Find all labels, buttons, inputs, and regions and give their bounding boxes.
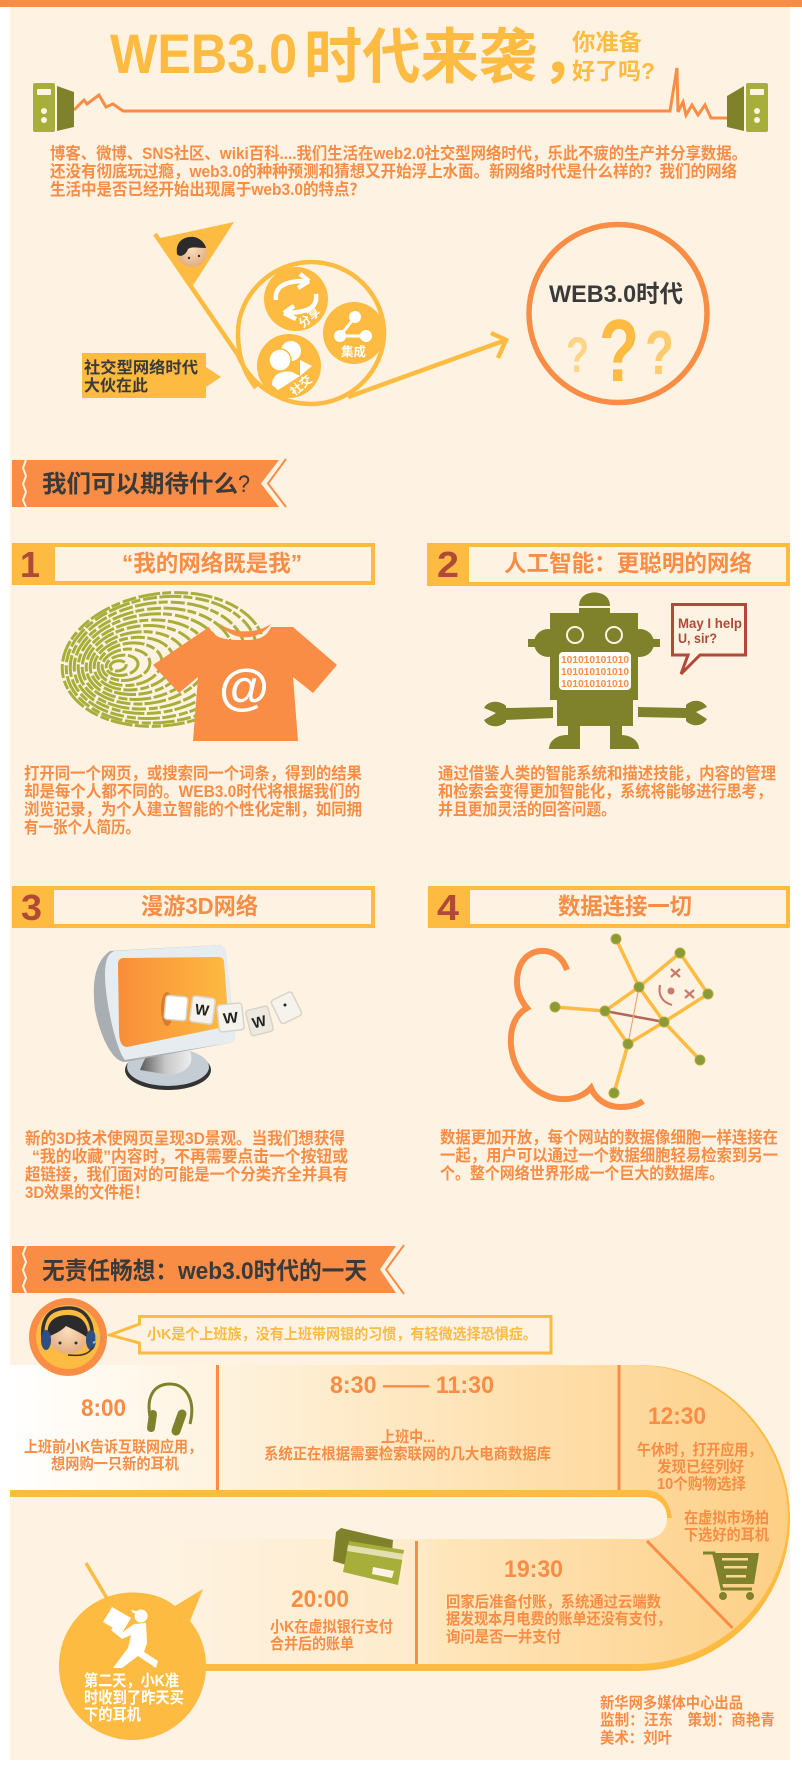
text block 2 <box>438 763 776 819</box>
step: bid in virtual market: 下选好的耳机 <box>684 1526 769 1544</box>
header 2: 人工智能：更聪明的网络 <box>504 550 752 576</box>
speech circle: next day delivery: 时收到了昨天买 <box>84 1689 184 1707</box>
callout: social web era label: 大伙在此 <box>84 376 148 395</box>
panel: 4 data connects everything <box>428 886 788 1183</box>
circle: web3.0 era: WEB3.0时代 <box>549 281 683 308</box>
callout: who is Xiao K <box>110 1316 551 1353</box>
title: 时代来袭 <box>304 24 537 91</box>
text block 4 <box>440 1127 778 1183</box>
icon: cloud outline <box>511 951 643 1107</box>
heading banner: what to expect <box>12 459 286 507</box>
icon: headset face: ♪ <box>91 1328 100 1348</box>
icon: robot: 101010101010 <box>561 678 629 690</box>
icon: t-shirt <box>153 623 337 741</box>
step 20:00 <box>270 1586 393 1653</box>
text block 2: 和检索会变得更加智能化，系统将能够进行思考， <box>438 781 772 801</box>
title <box>110 22 655 91</box>
text block 3: 3D效果的文件柜！ <box>25 1182 149 1202</box>
keys: W <box>194 1001 211 1020</box>
step 8:30 - 11:30: 上班中... <box>381 1428 435 1446</box>
intro text: 生活中是否已经开始出现属于web3.0的特点？ <box>50 180 365 199</box>
step 8:00: 想网购一只新的耳机 <box>51 1454 179 1473</box>
step 8:30 - 11:30: 8:30 —— 11:30 <box>330 1372 494 1399</box>
signal line connecting servers <box>74 68 728 118</box>
step 8:00: 上班前小K告诉互联网应用， <box>24 1437 202 1456</box>
credits: 新华网多媒体中心出品 <box>600 1693 743 1712</box>
circle: web3.0 era: ? <box>566 327 589 383</box>
step 8:30 - 11:30 <box>264 1372 551 1463</box>
header 3: 漫游3D网络 <box>141 893 258 919</box>
heading banner: one day in web3.0: 无责任畅想：web3.0时代的一天 <box>42 1258 367 1285</box>
panel: 3 roam the 3D web <box>12 886 373 1202</box>
keys: W <box>251 1012 269 1032</box>
text block 1: 却是每个人都不同的。WEB3.0时代将根据我们的 <box>24 782 360 801</box>
circle: web3.0 era: ? <box>599 301 639 400</box>
icon: 3D monitor <box>94 945 302 1090</box>
icon: share circle <box>264 267 328 331</box>
credits <box>600 1693 775 1747</box>
text block 3: 新的3D技术使网页呈现3D景观。当我们想获得 <box>25 1128 345 1148</box>
speech circle: next day delivery <box>59 1563 206 1740</box>
step 20:00: 20:00 <box>291 1586 349 1613</box>
header 4: 数据连接一切 <box>558 893 692 919</box>
icon: left server <box>33 83 74 132</box>
credits: 美术：刘叶 <box>600 1728 672 1747</box>
avatar: Xiao K <box>29 1298 107 1376</box>
text block 4: 数据更加开放，每个网站的数据像细胞一样连接在 <box>440 1127 778 1147</box>
icon: social circle <box>257 334 321 399</box>
flag <box>160 222 234 287</box>
step 12:30: 午休时，打开应用， <box>637 1440 762 1459</box>
callout: social web era label: 社交型网络时代 <box>84 358 198 377</box>
speech circle: next day delivery: 第二天，小K准 <box>84 1671 179 1690</box>
title: 好了吗? <box>572 58 655 84</box>
panel: 1 my network is me <box>12 543 373 837</box>
circle: web3.0 era: ? <box>645 319 674 388</box>
text block 3: “我的收藏”内容时，不再需要点击一个按钮或 <box>32 1146 348 1166</box>
header 1: 1 <box>20 544 40 585</box>
step 12:30 <box>637 1403 762 1493</box>
panel: 2 artificial intelligence <box>427 543 788 819</box>
icon: right server <box>727 83 768 132</box>
intro text: 博客、微博、SNS社区、wiki百科....我们生活在web2.0社交型网络时代，乐此不疲的生产并分享数据。 <box>50 143 747 163</box>
circle: web3.0 era <box>529 224 707 402</box>
heading banner: one day in web3.0 <box>12 1245 404 1294</box>
step 8:30 - 11:30: 系统正在根据需要检索联网的几大电商数据库 <box>264 1444 551 1463</box>
callout: may I help <box>672 604 746 674</box>
icon: shopping cart <box>703 1553 759 1600</box>
text block 3: 超链接，我们面对的可能是一个分类齐全并具有 <box>25 1164 348 1184</box>
diagram: social web bubble <box>155 222 506 404</box>
text block 2: 并且更加灵活的回答问题。 <box>438 799 616 819</box>
text block 4: 一起，用户可以通过一个数据细胞轻易检索到另一 <box>440 1145 778 1165</box>
step 19:30 <box>446 1556 671 1646</box>
step 20:00: 合并后的账单 <box>270 1634 354 1653</box>
flag pole, circle and arrow line <box>155 234 506 404</box>
icon: share circle: 分享 <box>295 304 323 331</box>
step 12:30: 发现已经列好 <box>657 1457 744 1476</box>
icon: robot <box>484 592 707 749</box>
step 19:30: 询问是否一并支付 <box>446 1627 561 1646</box>
text block 1: 打开同一个网页，或搜索同一个词条，得到的结果 <box>24 763 362 783</box>
text block 3 <box>25 1128 348 1202</box>
text block 1 <box>24 763 362 837</box>
header 4 <box>428 886 788 928</box>
icon: face <box>177 237 207 267</box>
header 1: “我的网络既是我” <box>122 550 302 576</box>
heading banner: what to expect: 我们可以期待什么 <box>42 471 238 498</box>
text block 2: 通过借鉴人类的智能系统和描述技能，内容的管理 <box>438 763 776 783</box>
intro text: 还没有彻底玩过瘾，web3.0的种种预测和猜想又开始浮上水面。新网络时代是什么样的？我们的网络 <box>50 161 737 181</box>
credits: 监制：汪东 策划：商艳青 <box>600 1710 775 1729</box>
step 12:30: 12:30 <box>648 1403 706 1430</box>
icon: headphones <box>149 1384 192 1431</box>
header 3: 3 <box>21 887 42 928</box>
icon: social circle: 社交 <box>287 372 315 399</box>
keys: W <box>222 1009 240 1028</box>
icon: t-shirt: @ <box>219 659 269 715</box>
step: bid in virtual market <box>684 1508 769 1544</box>
emoticon <box>660 969 694 1005</box>
callout: social web era label <box>82 353 221 398</box>
callout: may I help: May I help <box>678 615 742 631</box>
step 12:30: 10个购物选择 <box>657 1474 746 1493</box>
title: ， <box>541 22 601 89</box>
header 3 <box>12 886 373 928</box>
icon: robot: 101010101010 <box>561 666 629 678</box>
header 4: 4 <box>437 887 459 928</box>
icon: integrate circle <box>323 302 385 364</box>
title: WEB3.0 <box>110 22 297 85</box>
callout: may I help: U, sir? <box>678 630 717 646</box>
icon: fingerprint <box>53 580 274 739</box>
step 19:30: 19:30 <box>504 1556 563 1583</box>
header 2 <box>427 543 788 586</box>
header 2: 2 <box>437 544 459 585</box>
step 8:00: 8:00 <box>81 1395 126 1422</box>
text block 1: 浏览记录，为个人建立智能的个性化定制，如同拥 <box>24 799 362 819</box>
title: 你准备 <box>572 29 642 55</box>
timeline band <box>10 1365 790 1671</box>
icon: courier <box>103 1607 158 1668</box>
header 1 <box>12 543 373 585</box>
step 20:00: 小K在虚拟银行支付 <box>270 1617 393 1636</box>
step: bid in virtual market: 在虚拟市场拍 <box>684 1508 769 1527</box>
step 8:00 <box>24 1384 202 1473</box>
intro text <box>50 143 747 199</box>
text block 4: 个。整个网络世界形成一个巨大的数据库。 <box>440 1163 724 1183</box>
icon: integrate circle: 集成 <box>341 344 367 359</box>
heading banner: what to expect: ? <box>238 471 250 498</box>
icon: robot: 101010101010 <box>561 654 629 666</box>
step 19:30: 据发现本月电费的账单还没有支付， <box>446 1609 671 1628</box>
step 19:30: 回家后准备付账，系统通过云端数 <box>446 1592 661 1611</box>
speech circle: next day delivery: 下的耳机 <box>84 1706 141 1724</box>
keys <box>161 991 302 1036</box>
icon: bank cards <box>333 1528 404 1585</box>
callout: who is Xiao K: 小K是个上班族，没有上班带网银的习惯，有轻微选择恐惧症。 <box>147 1325 537 1343</box>
text block 1: 有一张个人简历。 <box>24 817 140 837</box>
network diagram <box>550 934 713 1098</box>
